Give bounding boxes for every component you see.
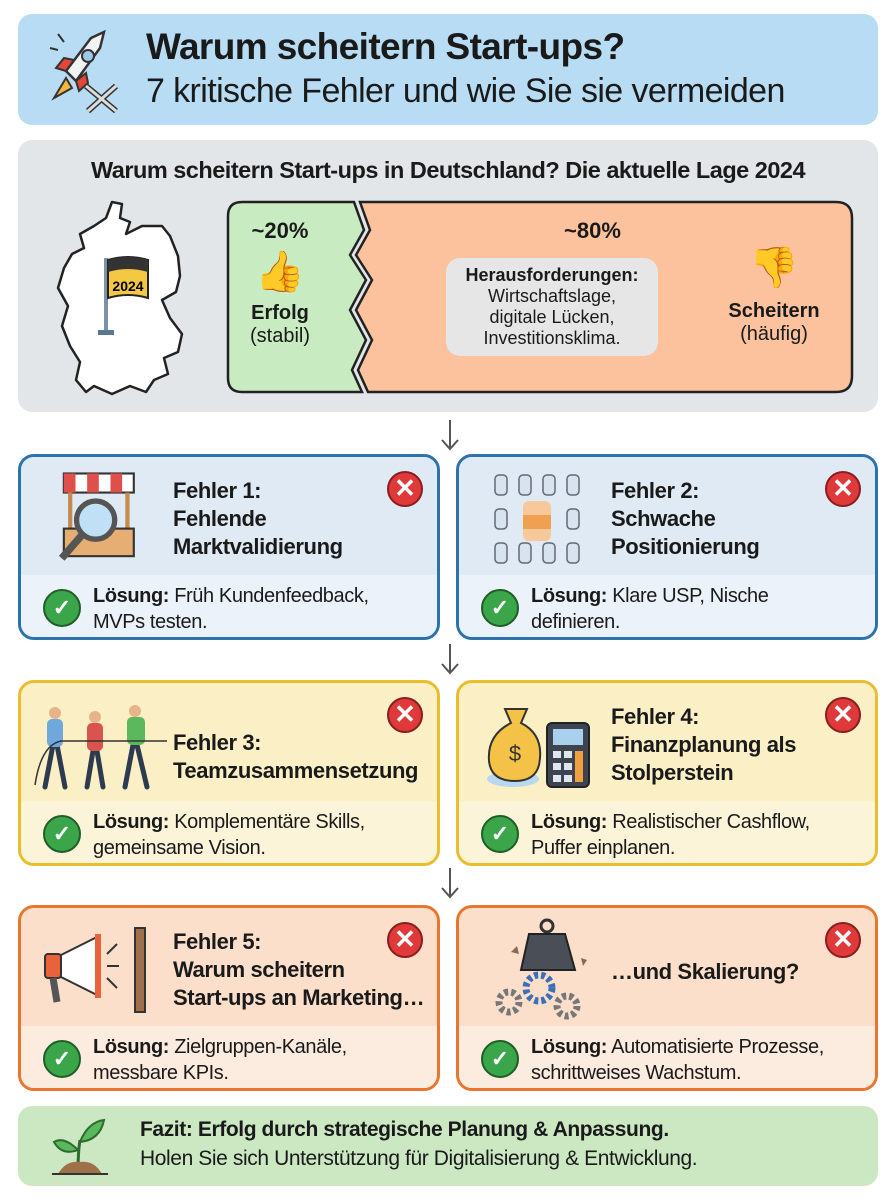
card: Fehler 2: Lösung: Klare USP, Nische [531, 585, 768, 607]
card: Fehler 4 [456, 680, 878, 866]
callout: challenges: Herausforderungen: [465, 265, 639, 285]
success label [250, 218, 310, 347]
icon: rocket and tools [50, 30, 118, 114]
card: Fehler 4: Finanzplanung als [611, 732, 796, 757]
icon: thumbs up: 👍 [255, 250, 305, 294]
success label: ~20% [252, 218, 308, 243]
title: Warum scheitern Start-ups? [146, 26, 624, 67]
card: Fehler 2: ✓ [491, 595, 509, 620]
subtitle: 7 kritische Fehler und wie Sie sie vermeiden [146, 72, 785, 110]
icon: tug of war team [34, 705, 167, 790]
card: Fehler 1: Marktvalidierung [173, 534, 343, 559]
card: Fehler 5: messbare KPIs. [93, 1062, 229, 1084]
card: Fehler 3: Teamzusammensetzung [173, 758, 418, 783]
card: Skalierung: ✓ [491, 1046, 509, 1071]
icon: thumbs down: 👎 [749, 246, 799, 290]
callout: challenges: Wirtschaftslage, [488, 286, 616, 306]
icon: megaphone against wall [44, 927, 146, 1013]
card: Fehler 3: gemeinsame Vision. [93, 837, 266, 859]
failure label: Scheitern [728, 300, 820, 322]
card: Skalierung: ✕ [832, 924, 854, 954]
card: Fehler 5: Start-ups an Marketing… [173, 985, 424, 1010]
arrow [441, 644, 459, 674]
card: Fehler 3: ✓ [53, 821, 71, 846]
failure label [728, 246, 820, 345]
footer: conclusion: Holen Sie sich Unterstützung für Digitalisierung & Entwicklung. [140, 1147, 697, 1170]
card: Fehler 1: ✕ [394, 473, 416, 503]
card: Fehler 4: Stolperstein [611, 760, 733, 785]
card: Fehler 4: Lösung: Realistischer Cashflow, [531, 811, 810, 833]
card: Fehler 3: ✕ [394, 699, 416, 729]
card: Fehler 5: ✕ [394, 924, 416, 954]
card: Fehler 2: definieren. [531, 611, 620, 633]
card: Fehler 1 [18, 454, 440, 640]
card: Fehler 5: ✓ [53, 1046, 71, 1071]
arrow [441, 868, 459, 898]
card: Fehler 4: ✓ [491, 821, 509, 846]
failure percentage: ~80% [564, 218, 621, 243]
callout: challenges [446, 258, 658, 356]
failure label: (häufig) [740, 323, 808, 345]
success label: Erfolg [251, 302, 309, 324]
card: Fehler 4: Fehler 4: [611, 704, 699, 729]
icon: sprout [52, 1118, 108, 1175]
split bar: success vs failure [226, 200, 854, 394]
card: Fehler 2 [456, 454, 878, 640]
header panel [18, 14, 878, 125]
icon: money bag and calculator: $ [509, 741, 521, 766]
card: Fehler 1: MVPs testen. [93, 611, 207, 633]
icon: weight crushing gears [496, 918, 587, 1020]
success label: (stabil) [250, 325, 310, 347]
card: Fehler 2: Fehler 2: [611, 478, 699, 503]
card: Fehler 3: Fehler 3: [173, 730, 261, 755]
card: Fehler 4: ✕ [832, 699, 854, 729]
card: Fehler 2: Schwache [611, 506, 715, 531]
panel heading: Warum scheitern Start-ups in Deutschland? Die aktuelle Lage 2024 [91, 157, 805, 183]
card: Fehler 5 [18, 905, 440, 1091]
footer: conclusion: Fazit: Erfolg durch strategische Planung & Anpassung. [140, 1118, 669, 1141]
card: Fehler 1: Fehler 1: [173, 478, 261, 503]
card: Fehler 1: Fehlende [173, 506, 266, 531]
icon: market stall with magnifier [59, 472, 135, 561]
icon: money bag and calculator [487, 708, 590, 788]
footer: conclusion [18, 1106, 878, 1186]
card: Fehler 1: ✓ [53, 595, 71, 620]
callout: challenges: Investitionsklima. [483, 328, 621, 348]
card: Skalierung: …und Skalierung? [611, 959, 799, 984]
arrow [441, 420, 459, 450]
icon: bottles [494, 474, 580, 564]
card: Skalierung: schrittweises Wachstum. [531, 1062, 741, 1084]
card: Fehler 5: Lösung: Zielgruppen-Kanäle, [93, 1036, 347, 1058]
card: Fehler 5: Fehler 5: [173, 929, 261, 954]
card: Skalierung: Lösung: Automatisierte Prozesse, [531, 1036, 824, 1058]
card: Fehler 4: Puffer einplanen. [531, 837, 675, 859]
icon: germany map with flag [56, 200, 184, 396]
card: Fehler 3 [18, 680, 440, 866]
card: Fehler 5: Warum scheitern [173, 957, 345, 982]
panel: current situation 2024 [18, 140, 878, 412]
card: Fehler 2: Positionierung [611, 534, 759, 559]
callout: challenges: digitale Lücken, [489, 307, 615, 327]
card: Fehler 2: ✕ [832, 473, 854, 503]
card: Skalierung [456, 905, 878, 1091]
icon: germany map with flag: 2024 [112, 278, 144, 294]
card: Fehler 3: Lösung: Komplementäre Skills, [93, 811, 365, 833]
card: Fehler 1: Lösung: Früh Kundenfeedback, [93, 585, 369, 607]
